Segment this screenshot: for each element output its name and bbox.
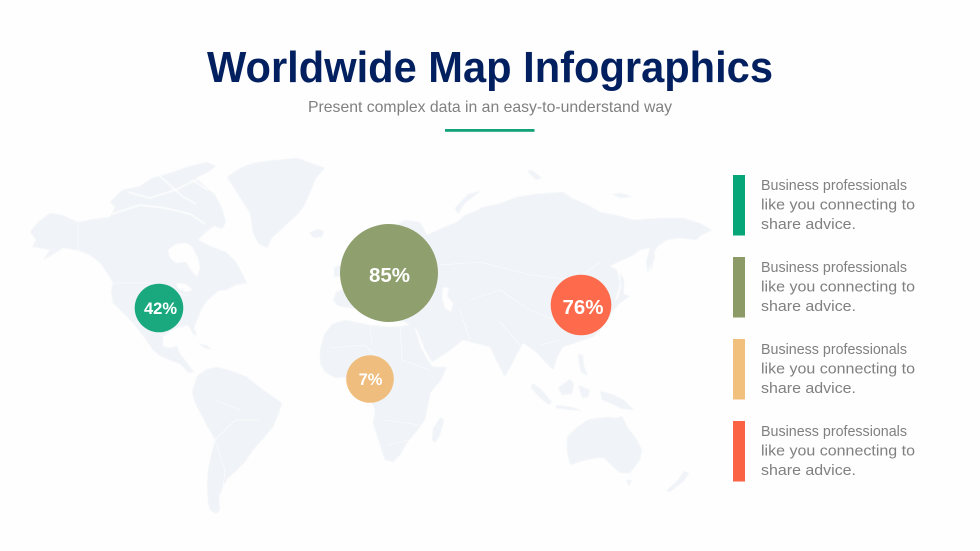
title: Worldwide Map Infographics xyxy=(207,43,773,92)
legend item: coral: like you connecting to xyxy=(761,442,915,460)
Madagascar xyxy=(432,417,444,443)
Eurasia xyxy=(333,192,712,377)
bubble: 7% Africa: 7% xyxy=(359,371,383,389)
country borders xyxy=(78,222,600,487)
legend item: olive: like you connecting to xyxy=(761,278,915,296)
Sakhalin and Japan xyxy=(650,250,655,272)
legend item: olive: share advice. xyxy=(761,298,856,315)
South America xyxy=(192,367,282,514)
legend item: coral xyxy=(733,421,915,482)
legend item: olive: Business professionals xyxy=(761,259,907,276)
legend item: amber: like you connecting to xyxy=(761,360,915,378)
legend item: amber: Business professionals xyxy=(761,341,907,358)
legend item: green: Business professionals xyxy=(761,177,907,194)
Iceland xyxy=(309,229,324,238)
legend item: green xyxy=(733,175,915,236)
Arctic channels cut-out xyxy=(112,176,208,224)
bubble: 85% Europe xyxy=(340,224,438,322)
legend item: olive xyxy=(733,257,915,318)
bubble: 76% Asia xyxy=(551,275,611,335)
legend item: amber xyxy=(733,339,915,400)
Greenland xyxy=(227,158,325,248)
Scandinavia and Arctic islands xyxy=(455,191,481,214)
legend item: amber: share advice. xyxy=(761,380,856,397)
Southeast Asia islands xyxy=(531,383,552,405)
Caspian Sea cut-out xyxy=(442,287,453,312)
bubble: 7% Africa xyxy=(346,355,394,403)
world map xyxy=(30,158,712,514)
subtitle: Present complex data in an easy-to-understand way xyxy=(308,99,672,116)
legend item: green: share advice. xyxy=(761,216,856,233)
Great Lakes cut-out xyxy=(176,283,193,292)
United Kingdom xyxy=(334,265,343,277)
legend item: coral: share advice. xyxy=(761,462,856,479)
title underline xyxy=(445,129,534,132)
New Zealand xyxy=(666,471,689,492)
legend item: green: like you connecting to xyxy=(761,196,915,214)
Hudson Bay cut-out xyxy=(168,243,200,277)
Africa xyxy=(320,320,447,462)
bubble: 42% North America: 42% xyxy=(144,300,177,318)
Australia xyxy=(567,416,642,473)
bubble: 76% Asia: 76% xyxy=(562,296,604,319)
North America xyxy=(30,162,247,373)
bubble: 42% North America xyxy=(135,284,183,332)
Cuba xyxy=(197,343,213,350)
bubble: 85% Europe: 85% xyxy=(369,264,410,287)
legend item: coral: Business professionals xyxy=(761,423,907,440)
